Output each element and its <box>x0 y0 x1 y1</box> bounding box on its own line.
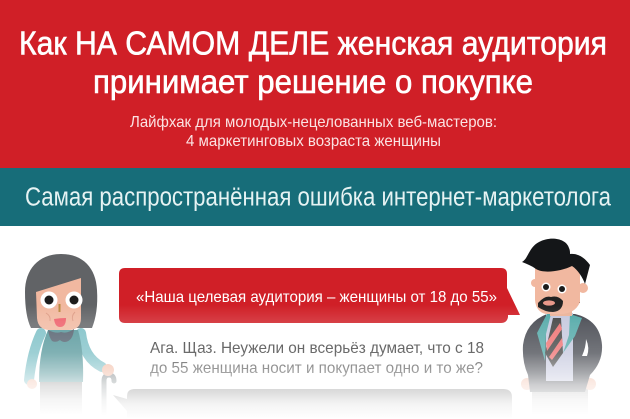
grandmother cane <box>104 375 114 419</box>
grandmother nose <box>58 304 60 312</box>
marketer tie <box>545 318 563 367</box>
marketer eyes <box>542 282 566 294</box>
marketer ears <box>531 279 588 293</box>
marketer neck <box>550 308 572 316</box>
grandmother arms <box>29 333 41 380</box>
marketer hair <box>522 239 590 284</box>
marketer lapels <box>537 314 582 361</box>
grandmother hands <box>27 379 37 389</box>
marketer face <box>535 266 580 314</box>
second speech bubble fading out <box>113 389 512 419</box>
grandmother mouth <box>54 318 66 327</box>
comment text: до 55 женщина носит и покупает одно и то же? <box>150 360 483 377</box>
title <box>19 26 607 101</box>
grandmother hair <box>25 254 97 328</box>
character: grandmother <box>25 254 114 419</box>
title: принимает решение о покупке <box>93 64 533 101</box>
grandmother torso <box>39 330 83 382</box>
grandmother wrinkles <box>46 312 75 321</box>
header panel <box>0 0 630 168</box>
grandmother face <box>36 278 81 330</box>
marketer sideburn <box>576 295 580 303</box>
red speech bubble: «Наша целевая аудитория – женщины от 18 до 55» <box>136 289 497 306</box>
comment text: Ага. Щаз. Неужели он всерьёз думает, что с 18 <box>150 340 484 357</box>
teal band heading <box>0 168 630 226</box>
subtitle: 4 маркетинговых возраста женщины <box>186 133 441 150</box>
grandmother eyes <box>40 292 82 308</box>
grandmother collar <box>48 329 74 342</box>
comment text <box>150 340 484 377</box>
marketer legs <box>532 385 588 419</box>
marketer pocket gap <box>582 339 588 356</box>
subtitle: Лайфхак для молодых-нецелованных веб-мастеров: <box>130 114 497 131</box>
fade overlay <box>0 305 630 415</box>
marketer shirt <box>546 313 573 381</box>
grandmother legs <box>40 380 82 419</box>
subtitle <box>130 114 497 150</box>
character: marketer <box>521 239 602 419</box>
marketer hands <box>521 378 533 390</box>
marketer jacket <box>523 314 602 392</box>
red speech bubble <box>119 268 520 323</box>
marketer moustache and mouth <box>538 296 563 312</box>
